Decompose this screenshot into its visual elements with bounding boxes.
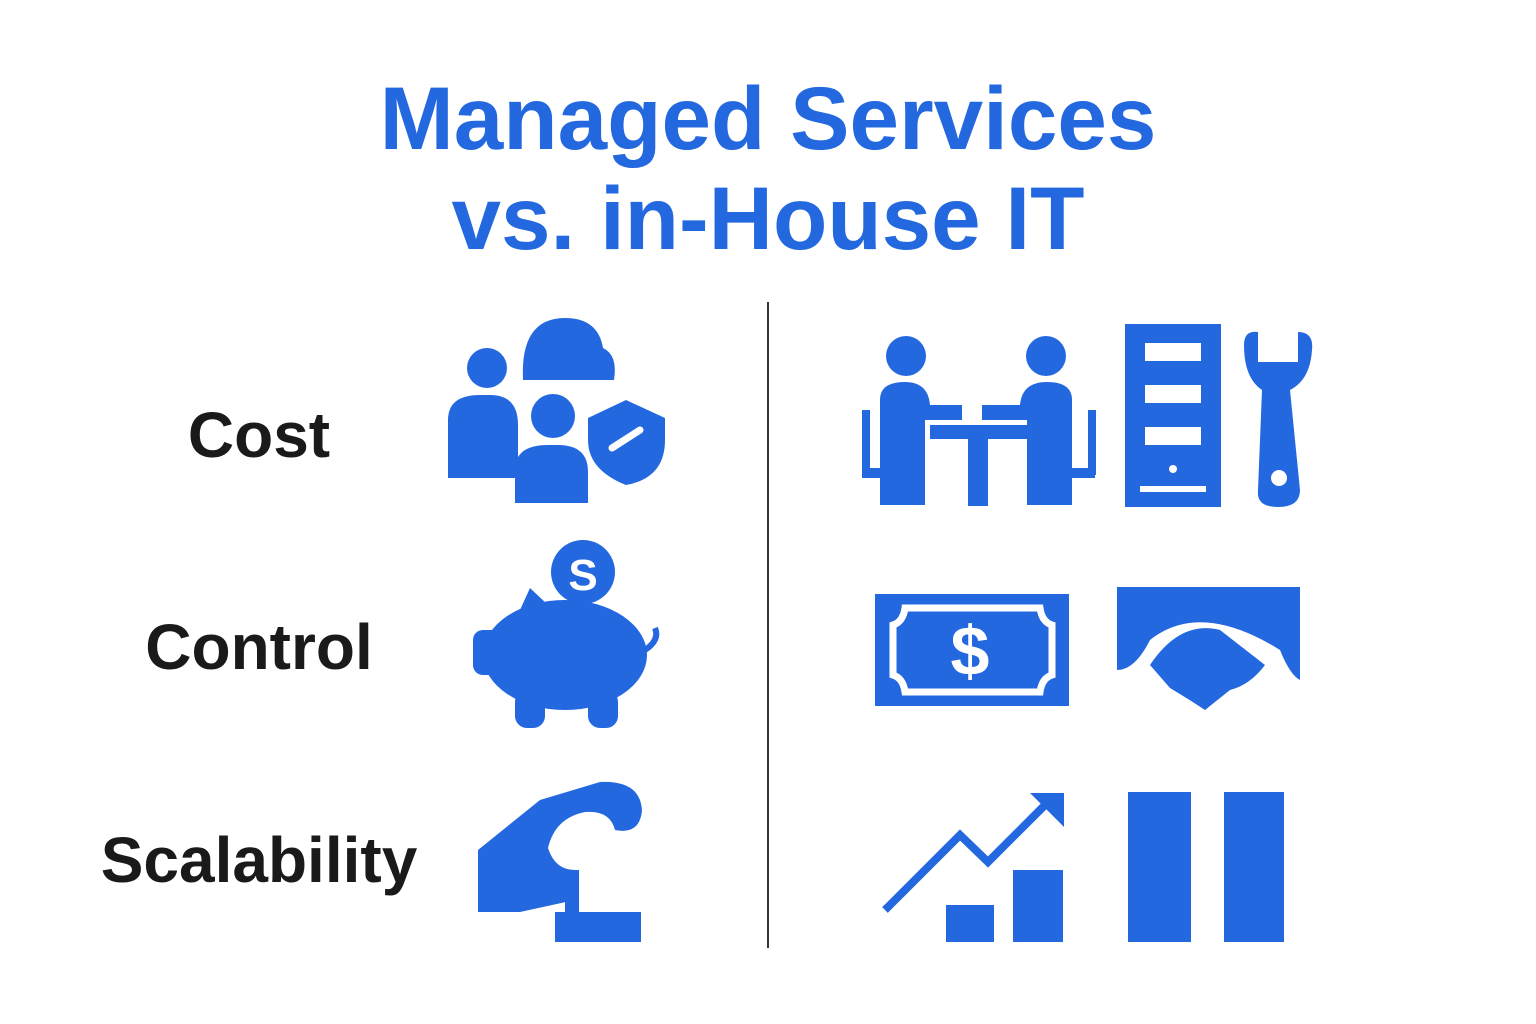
- label: Scalability: Scalability: [101, 824, 417, 896]
- label: Control: Control: [145, 611, 373, 683]
- label: Cost: Cost: [188, 399, 330, 471]
- icon: hand with coin: [478, 782, 642, 942]
- icon: growth chart: [885, 793, 1064, 942]
- title: [380, 68, 1156, 268]
- icon: meeting people: [862, 336, 1096, 506]
- icon: dollar bill: [875, 594, 1069, 706]
- title: Managed Services: [380, 68, 1156, 168]
- icon: server: [1125, 324, 1221, 507]
- icon: piggy bank: S: [568, 551, 598, 600]
- icon: wrench: [1244, 332, 1312, 507]
- icon: bars: [1128, 792, 1284, 942]
- icon: dollar bill: $: [951, 612, 989, 690]
- icon: handshake: [1117, 587, 1300, 710]
- icon: piggy bank: [473, 540, 656, 728]
- title: vs. in-House IT: [452, 168, 1084, 268]
- icon: team cloud shield: [448, 318, 665, 503]
